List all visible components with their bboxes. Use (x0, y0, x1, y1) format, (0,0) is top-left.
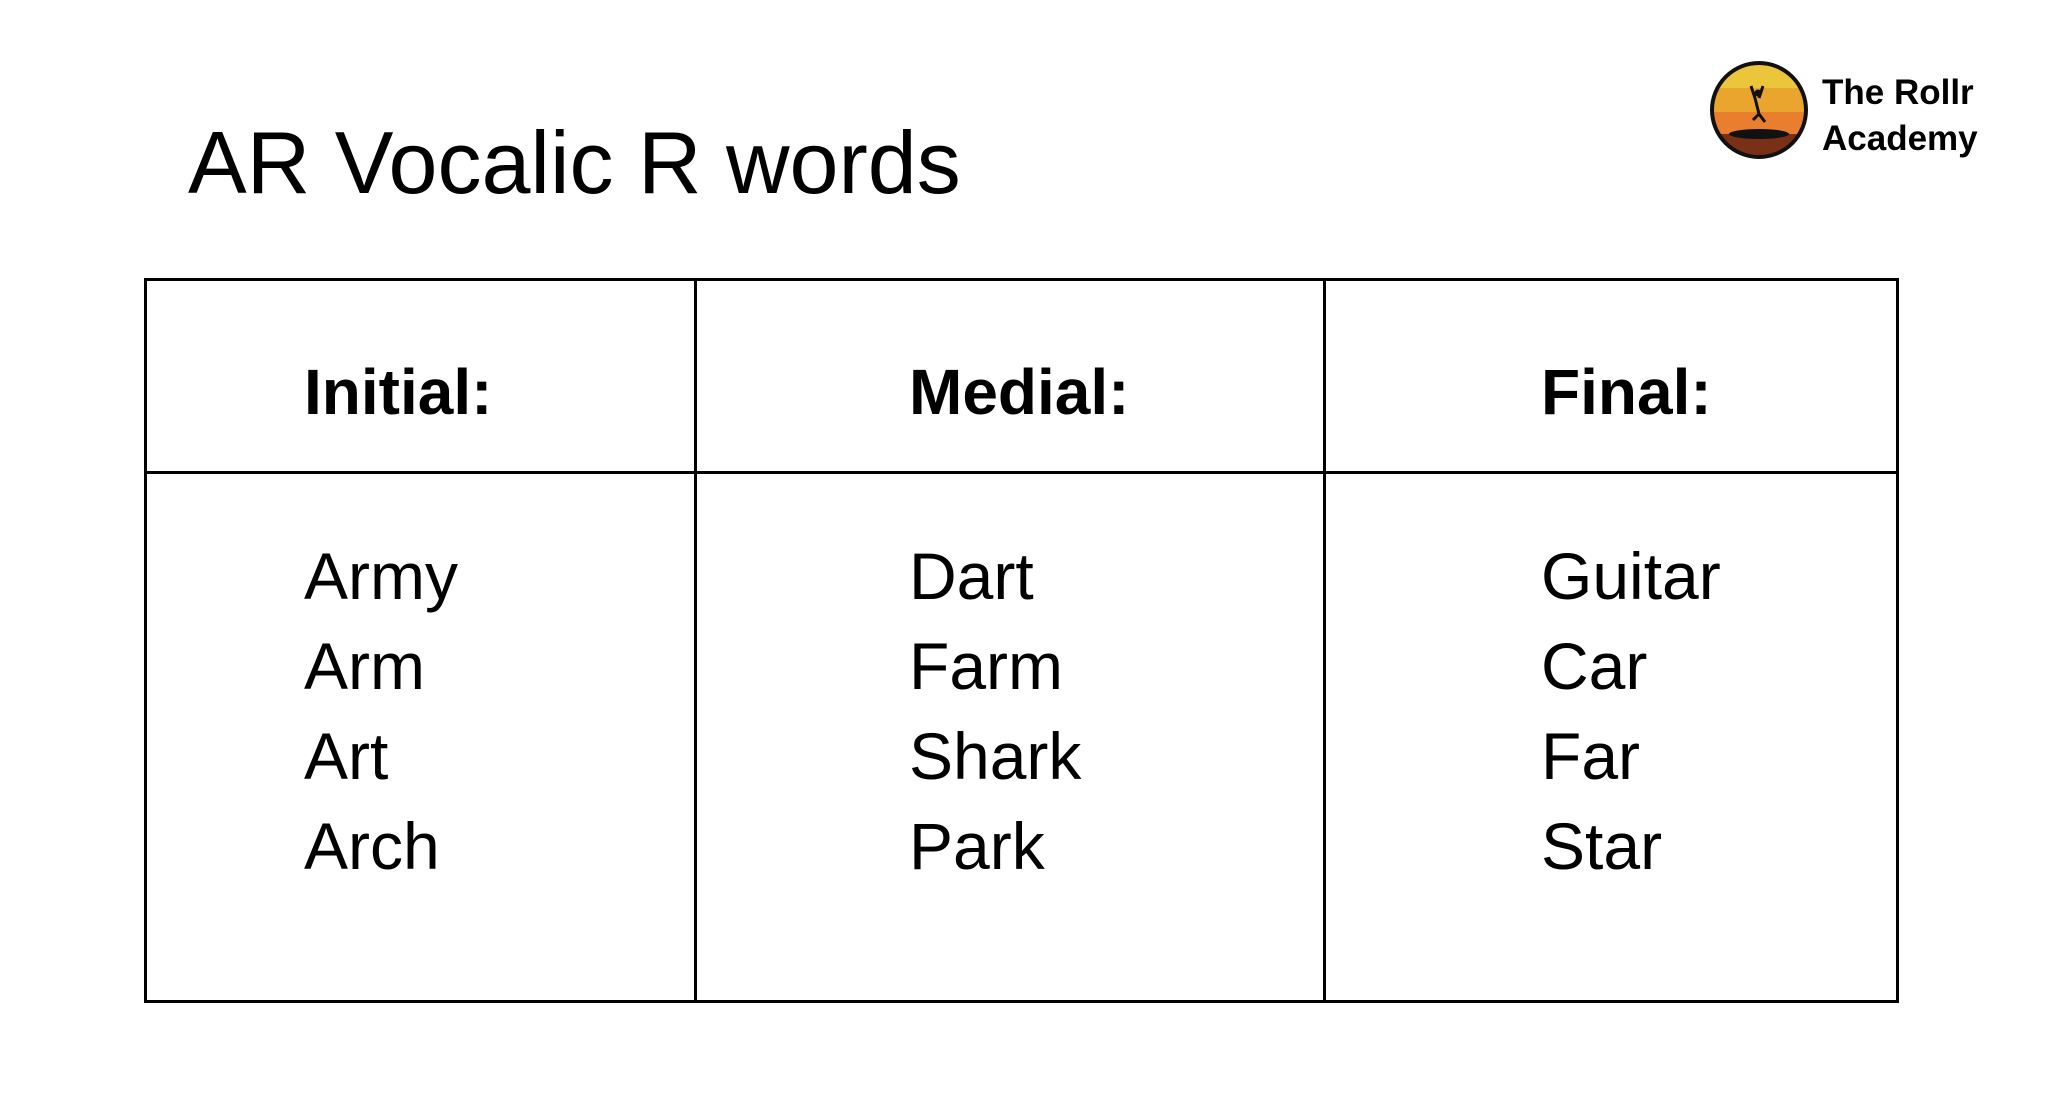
logo (1710, 61, 1978, 159)
list: initial words: Army (304, 539, 458, 613)
list: medial words: Shark (909, 719, 1081, 793)
logo: The Rollr (1822, 73, 1974, 112)
list: medial words: Dart (909, 539, 1034, 613)
list: medial words: Farm (909, 629, 1063, 703)
list: final words: Guitar (1541, 539, 1721, 613)
header: final: Final: (1541, 356, 1712, 428)
list: initial words (304, 539, 458, 883)
header: medial: Medial: (909, 356, 1129, 428)
list: final words: Star (1541, 809, 1662, 883)
list: final words (1541, 539, 1721, 883)
list: initial words: Art (304, 719, 388, 793)
list: initial words: Arch (304, 809, 440, 883)
list: medial words: Park (909, 809, 1045, 883)
title: AR Vocalic R words (188, 113, 961, 212)
list: initial words: Arm (304, 629, 425, 703)
header: initial: Initial: (304, 356, 492, 428)
logo: Academy (1822, 119, 1978, 158)
list: final words: Car (1541, 629, 1647, 703)
list: final words: Far (1541, 719, 1640, 793)
list: medial words (909, 539, 1082, 883)
table (144, 278, 1899, 1003)
